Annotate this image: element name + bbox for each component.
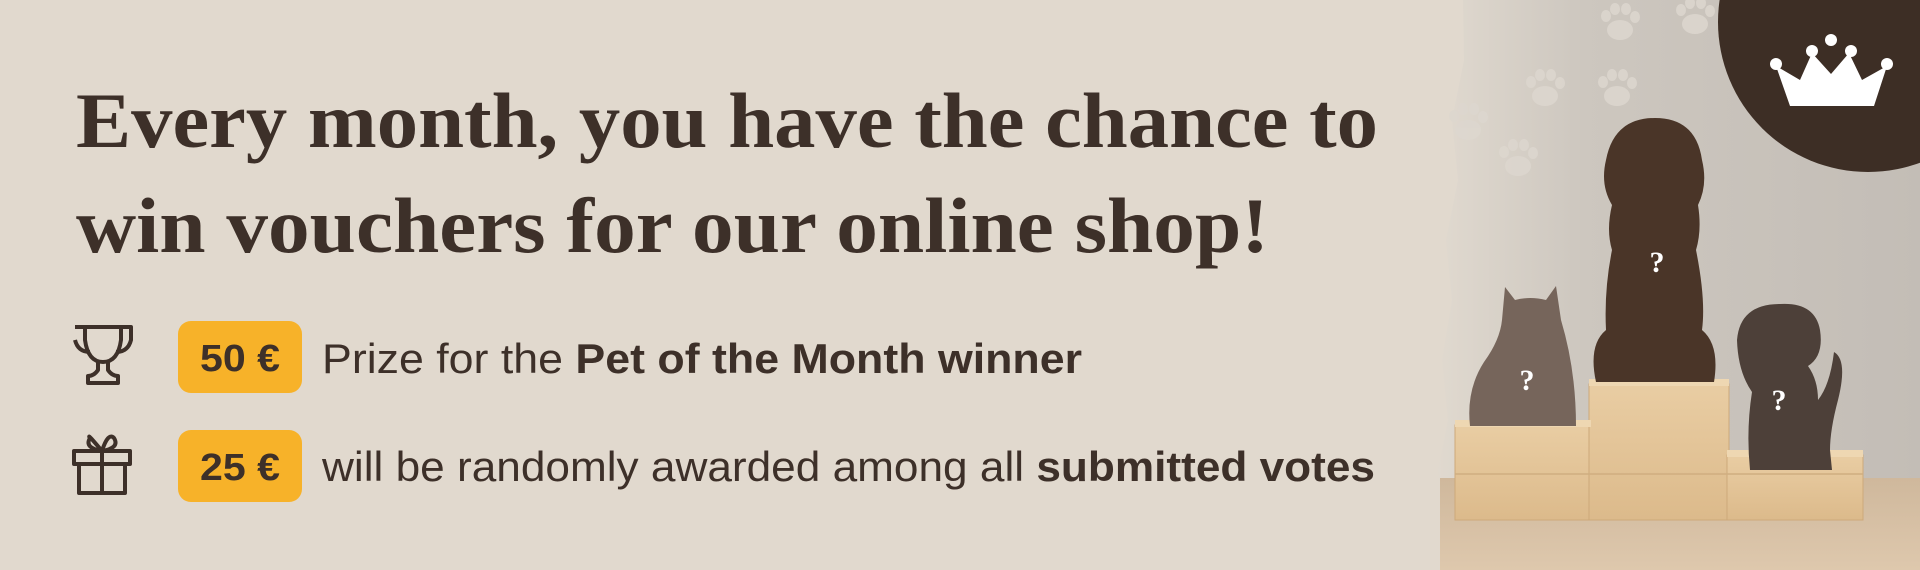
row: 50 euro prize xyxy=(75,321,1082,393)
icon: crown xyxy=(1770,34,1893,106)
icon: gift xyxy=(74,437,130,493)
photo panel: podium with pets xyxy=(1438,0,1920,570)
title: win vouchers for our online shop! xyxy=(76,182,1269,269)
silhouette: puppy: ? xyxy=(1772,384,1786,417)
silhouette: big dog: ? xyxy=(1650,246,1664,279)
silhouette: big dog xyxy=(1594,118,1716,382)
row: 25 euro votes xyxy=(74,430,1375,502)
icon: trophy xyxy=(75,327,131,383)
row: 25 euro votes: will be randomly awarded among all submitted votes xyxy=(321,443,1375,490)
crown badge circle xyxy=(1718,0,1920,172)
row: 25 euro votes: 25 € xyxy=(200,447,280,489)
badge: 25 € xyxy=(178,430,302,502)
silhouette: puppy xyxy=(1737,304,1842,470)
title: Every month, you have the chance to xyxy=(76,77,1378,164)
podium xyxy=(1455,379,1863,520)
silhouette: cat: ? xyxy=(1520,364,1534,397)
title xyxy=(76,77,1378,269)
silhouette: cat xyxy=(1469,286,1576,426)
row: 50 euro prize: 50 € xyxy=(200,338,280,380)
badge: 50 € xyxy=(178,321,302,393)
row: 50 euro prize: Prize for the Pet of the Month winner xyxy=(322,335,1082,382)
